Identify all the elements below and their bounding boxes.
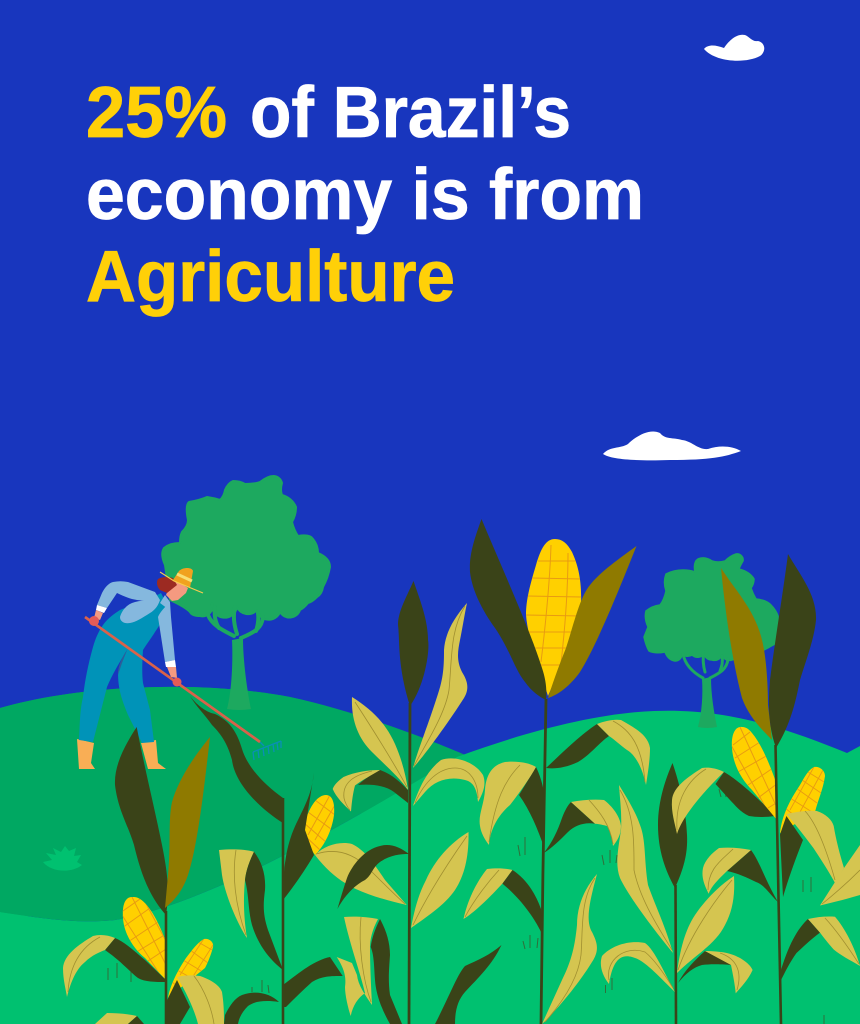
leaf dark (115, 727, 168, 915)
corn plant C (601, 763, 778, 1024)
olive leaf (548, 546, 636, 698)
rake head (253, 741, 281, 760)
left tan leaf (315, 843, 407, 905)
cobs (731, 727, 825, 833)
back hill edge shape (0, 687, 457, 921)
leaf dark right (283, 773, 314, 900)
rake pole (85, 617, 260, 742)
cloud middle right (603, 431, 741, 460)
left dark leaf (337, 845, 409, 909)
stem (409, 703, 410, 1024)
tall bottom leaf (542, 874, 597, 1024)
stem (674, 885, 677, 1024)
stem (541, 699, 546, 1024)
cuffs (96, 605, 176, 667)
leaf left tan (219, 849, 254, 938)
cobs (120, 895, 213, 998)
boots (77, 739, 166, 769)
corn plant F (190, 696, 343, 1024)
mid right leaf (727, 850, 778, 902)
leg shadow (118, 650, 127, 675)
olive leaf (721, 568, 772, 740)
left trunk (227, 638, 251, 710)
title (86, 73, 644, 317)
stem (165, 911, 167, 1024)
torso (120, 600, 160, 623)
bush (43, 846, 82, 871)
bottom right dark leaf (435, 945, 502, 1024)
leaf left dark (245, 852, 283, 970)
title: Agriculture (86, 237, 455, 317)
low right leaf (678, 951, 732, 983)
top leaf (398, 581, 428, 706)
far right tan leaf (820, 845, 860, 906)
lower right leaf (780, 919, 820, 983)
hair (157, 577, 177, 593)
front arm (158, 602, 175, 662)
leaf wavy top (190, 696, 283, 823)
lower leaves (105, 938, 166, 982)
wrists (94, 610, 177, 678)
bottom left hanging leaf (337, 917, 378, 1016)
back arm (97, 581, 160, 608)
tall left leaf (617, 785, 673, 953)
neck and face (166, 580, 188, 601)
dark leaf (470, 519, 546, 700)
upper right tan leaf (780, 816, 803, 897)
corn plant D (721, 554, 860, 1024)
dark arm to next stalk (716, 772, 776, 817)
wavy leaf (413, 603, 467, 768)
tree right (644, 554, 780, 728)
cob with grid (524, 539, 582, 696)
lower left leaf (464, 868, 512, 919)
hat (173, 568, 193, 588)
overalls (79, 593, 170, 743)
corn plant B (464, 519, 650, 1024)
left upper leaf (352, 697, 408, 790)
chest and straps (160, 595, 170, 609)
left droop leaf (358, 770, 408, 803)
hands (89, 616, 99, 626)
title: of Brazil’s (250, 73, 571, 153)
hat brim (160, 572, 203, 593)
right big leaf (411, 832, 469, 928)
right trunk (698, 677, 717, 728)
upper tan leaf (672, 768, 724, 834)
tree left (162, 476, 330, 710)
title: 25% (86, 73, 227, 153)
farmer (77, 568, 281, 769)
cloud top right (704, 35, 764, 61)
low left droop leaf (601, 942, 675, 992)
leaf lower right dark (283, 957, 343, 1007)
mid right leaf (544, 802, 595, 853)
leaf olive (165, 737, 210, 908)
corn plant A (315, 581, 502, 1024)
dark leaf (658, 763, 687, 888)
bottom left dark leaf (371, 919, 402, 1024)
right droop leaf (413, 758, 484, 806)
title: economy is from (86, 155, 644, 235)
back hill (0, 687, 470, 925)
corn plant E (63, 727, 279, 1024)
cob (304, 795, 336, 855)
front hill (0, 711, 860, 1024)
upper right leaf (546, 724, 609, 768)
stem (776, 745, 781, 1024)
grass tufts (108, 789, 824, 1024)
big right leaf (677, 876, 734, 973)
upper left leaf (519, 767, 544, 847)
hat band (177, 574, 192, 581)
stem (282, 798, 284, 1024)
dark leaf (769, 554, 816, 748)
